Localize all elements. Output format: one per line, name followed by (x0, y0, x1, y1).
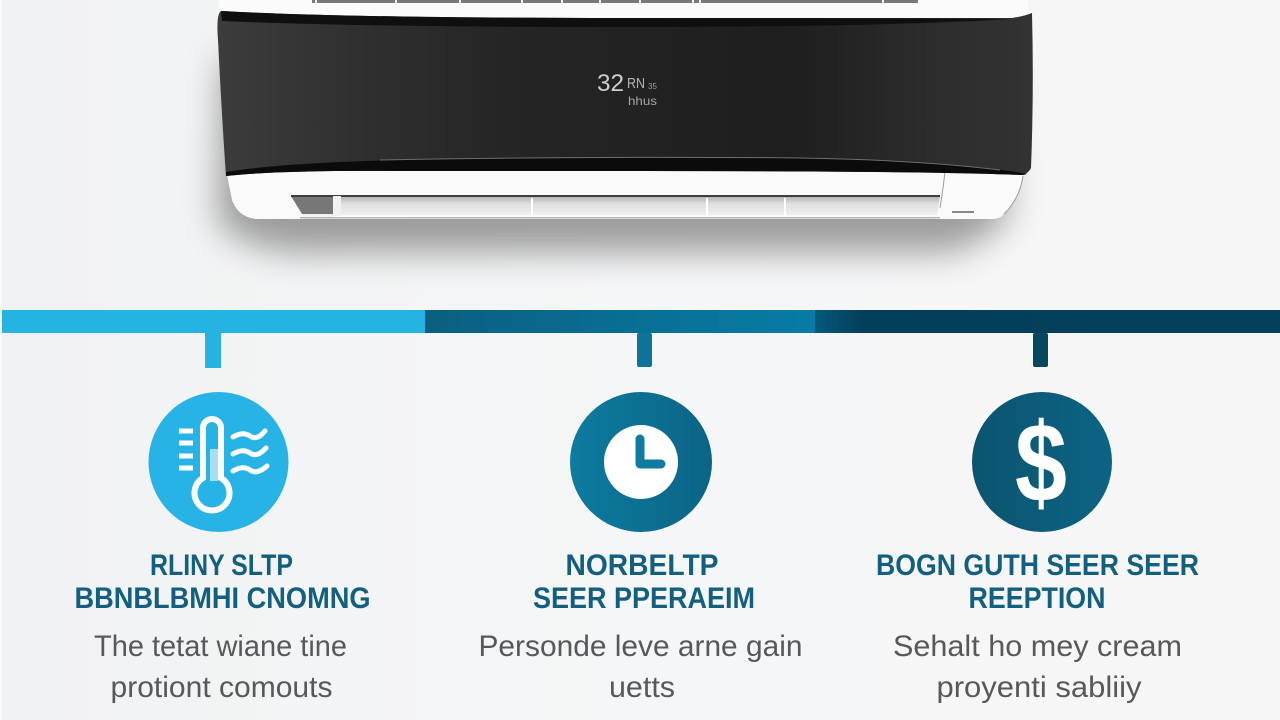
body text: protiont comouts (110, 671, 332, 704)
heading: RLINY SLTP (150, 549, 293, 582)
heading (74, 549, 370, 615)
lower casing right edge (940, 172, 1023, 214)
display readout: hhus (628, 94, 657, 108)
unit shadow (218, 60, 1008, 252)
column 2: time (478, 392, 802, 704)
body text (893, 630, 1182, 704)
icon: dollar sign (972, 392, 1112, 532)
display readout (597, 70, 657, 108)
display readout: 35 (648, 82, 657, 91)
heading: NORBELTP (566, 549, 718, 582)
column 3: savings (876, 392, 1199, 704)
body text (94, 630, 347, 704)
segment 3 (815, 310, 1280, 333)
panel lower band (226, 157, 1027, 176)
icon: dollar sign: $ (1015, 400, 1067, 525)
lower white casing (226, 170, 1023, 219)
heading: BBNBLBMHI CNOMNG (74, 582, 370, 615)
column 1: temperature (74, 392, 370, 704)
heading: BOGN GUTH SEER SEER (876, 549, 1199, 582)
air outlet vent (291, 195, 974, 218)
heading: SEER PPERAEIM (533, 582, 755, 615)
black front panel (217, 11, 1033, 176)
connector 2 (637, 333, 652, 367)
body text: proyenti sabliiy (936, 671, 1142, 704)
display readout: RN (627, 75, 645, 92)
segment 2 (425, 310, 815, 333)
body text: Sehalt ho mey cream (893, 630, 1182, 663)
body text (478, 630, 802, 704)
icon: clock (570, 392, 712, 532)
top air intake grille (312, 0, 918, 3)
heading (876, 549, 1199, 615)
connector 1 (205, 333, 221, 368)
connector 3 (1033, 333, 1048, 367)
icon: thermometer with air waves (148, 392, 288, 532)
panel top shadow band (221, 11, 1010, 27)
timeline bar (2, 310, 1280, 368)
body text: Personde leve arne gain (478, 630, 802, 663)
body text: uetts (609, 671, 675, 704)
display readout: 32 (597, 70, 624, 97)
heading (533, 549, 755, 615)
segment 1 (2, 310, 425, 333)
panel highlight (380, 157, 1000, 170)
top white casing (218, 0, 1029, 20)
body text: The tetat wiane tine (94, 630, 347, 663)
air conditioner unit (217, 0, 1033, 252)
heading: REEPTION (968, 582, 1106, 615)
